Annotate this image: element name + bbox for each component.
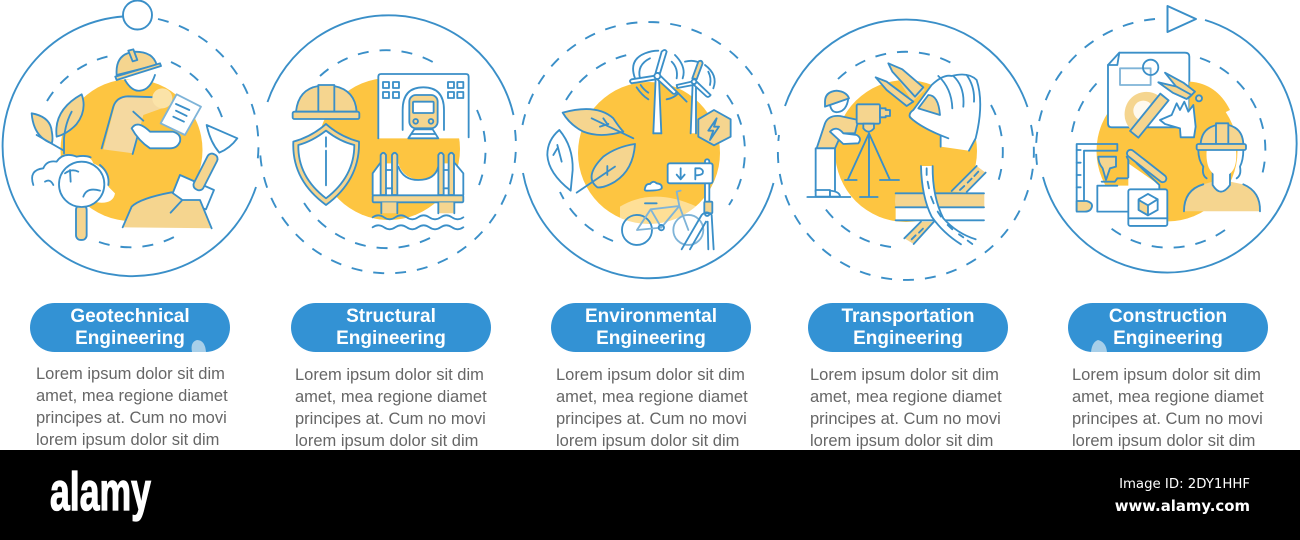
yellow circle [60, 79, 202, 221]
step label pill: Engineering [596, 328, 706, 349]
progress ring [1036, 6, 1297, 272]
step label pill [291, 303, 491, 352]
progress ring [260, 15, 516, 273]
description text: amet, mea regione diamet [1072, 388, 1264, 406]
description text: principes at. Cum no movi [810, 410, 1001, 428]
description text: amet, mea regione diamet [295, 388, 487, 406]
website: www.alamy.com [1115, 497, 1250, 515]
description text: Lorem ipsum dolor sit dim [556, 366, 745, 384]
step label pill: Geotechnical [70, 306, 190, 327]
description text: principes at. Cum no movi [295, 410, 486, 428]
step label pill: Environmental [585, 306, 717, 327]
description text: Lorem ipsum dolor sit dim [1072, 366, 1261, 384]
image id: Image ID: 2DY1HHF [1119, 477, 1250, 492]
step label pill: Engineering [336, 328, 446, 349]
progress ring [778, 20, 1034, 280]
yellow circle [578, 82, 720, 224]
description text: amet, mea regione diamet [810, 388, 1002, 406]
description text: principes at. Cum no movi [36, 409, 227, 427]
icon: blueprint, tools, 3D printer and female engineer [1077, 53, 1260, 226]
step label pill: Engineering [853, 328, 963, 349]
icon: engineer with plants and shovel [32, 49, 237, 240]
description text: principes at. Cum no movi [556, 410, 747, 428]
description text: lorem ipsum dolor sit dim [36, 431, 219, 449]
step label pill: Transportation [841, 306, 975, 327]
panel: structural engineering [260, 15, 516, 450]
description text: lorem ipsum dolor sit dim [295, 432, 478, 450]
description text: lorem ipsum dolor sit dim [810, 432, 993, 450]
description text: lorem ipsum dolor sit dim [1072, 432, 1255, 450]
step label pill: Engineering [1113, 328, 1223, 349]
step label pill [30, 303, 230, 352]
icon: play triangle [1168, 6, 1196, 32]
footer band [0, 450, 1300, 540]
icon: helmet, shield, train tunnel and bridge [293, 74, 469, 229]
description text: Lorem ipsum dolor sit dim [36, 365, 225, 383]
step label pill: Engineering [75, 328, 185, 349]
progress ring [3, 0, 258, 276]
panel: transportation engineering [778, 20, 1034, 450]
description text: principes at. Cum no movi [1072, 410, 1263, 428]
step label pill: Construction [1109, 306, 1227, 327]
step label pill [551, 303, 751, 352]
icon: wind turbines, leaves, bicycle and parking [547, 50, 731, 249]
description text: lorem ipsum dolor sit dim [556, 432, 739, 450]
progress ring [522, 22, 776, 278]
yellow circle [835, 80, 977, 222]
icon: surveyor, hand with pencils and roads [807, 63, 986, 245]
yellow circle [318, 78, 460, 220]
description text: amet, mea regione diamet [556, 388, 748, 406]
panel: construction engineering [1036, 6, 1297, 450]
step label pill [808, 303, 1008, 352]
logo: alamy: alamy [50, 462, 151, 522]
description text: Lorem ipsum dolor sit dim [810, 366, 999, 384]
yellow circle [1096, 80, 1238, 222]
step label pill: Structural [346, 306, 436, 327]
description text: amet, mea regione diamet [36, 387, 228, 405]
panel: environmental engineering [522, 22, 776, 450]
step label pill [1068, 303, 1268, 352]
description text: Lorem ipsum dolor sit dim [295, 366, 484, 384]
panel: geotechnical engineering [3, 0, 258, 449]
